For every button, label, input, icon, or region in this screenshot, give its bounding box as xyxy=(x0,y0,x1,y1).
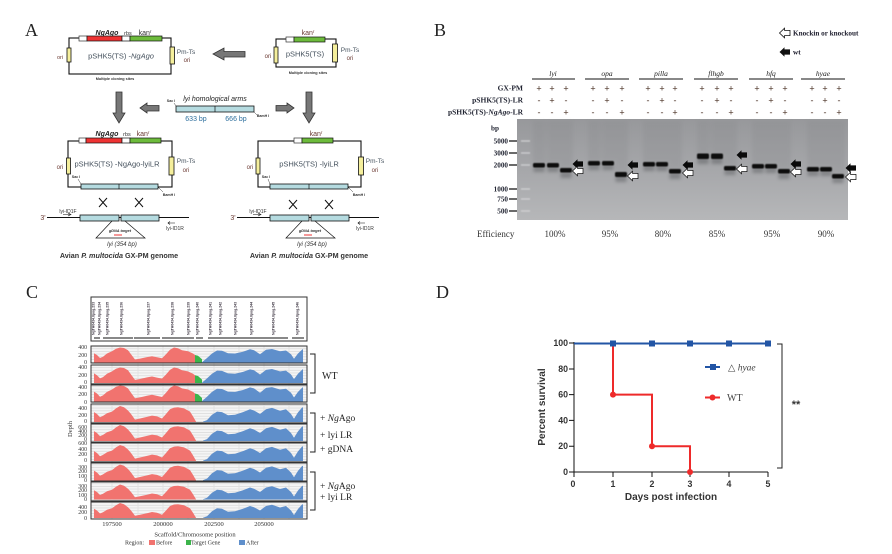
plus minus table: - xyxy=(756,108,758,118)
plus minus table: - xyxy=(784,96,786,106)
plasmid: pSHK5(TS) xyxy=(265,29,360,75)
lyi homological arms: lyi homological arms xyxy=(183,96,247,103)
panel C: depth coverage xyxy=(26,282,355,546)
legend: WT: WT xyxy=(727,393,743,404)
condition row labels xyxy=(448,84,524,116)
x axis labels xyxy=(102,521,274,538)
plus minus table: - xyxy=(606,108,608,118)
axes: 0 xyxy=(563,467,568,477)
plus minus table: - xyxy=(810,108,814,118)
lyi homological arms xyxy=(167,96,269,123)
gene headers: lyi xyxy=(549,69,557,78)
ladder labels: 3000 xyxy=(494,150,508,158)
plasmid: pSHK5(TS)-NgAgo: ori xyxy=(184,58,190,64)
plus minus table: - xyxy=(770,108,772,118)
plus minus table: + xyxy=(645,84,651,94)
plasmid: pSHK5(TS)-lyiLR: ori xyxy=(247,165,253,171)
panel letter A: A xyxy=(25,20,38,40)
annotation track: NgTH0434.lipog.243 xyxy=(234,302,238,335)
annotation track: NgTH0434.lipog.234 xyxy=(98,301,102,335)
efficiency row: 90% xyxy=(818,229,835,239)
plus minus table: + xyxy=(604,84,610,94)
efficiency row: 95% xyxy=(602,229,619,239)
depth axis labels: 400 xyxy=(78,385,87,391)
plus minus table xyxy=(536,84,842,118)
lyi homological arms: 633 bp xyxy=(185,116,207,123)
plus minus table: - xyxy=(538,108,540,118)
plus minus table: + xyxy=(728,108,734,118)
annotation track: NgTH0434.lipog.238 xyxy=(170,302,174,335)
efficiency row: 95% xyxy=(764,229,781,239)
plus minus table: + xyxy=(809,84,815,94)
genome recombination right: gDNA target xyxy=(298,229,322,233)
plus minus table: + xyxy=(619,84,625,94)
ladder labels: 750 xyxy=(497,196,508,204)
genome recombination right: 3' xyxy=(230,215,236,222)
plus minus table: - xyxy=(810,96,814,106)
gel image xyxy=(517,119,848,220)
plus minus table: - xyxy=(730,96,732,106)
depth area charts xyxy=(91,346,307,519)
annotation track: NgTH0434.lipog.244 xyxy=(250,301,254,335)
depth axis labels: 400 xyxy=(78,406,87,412)
panel letter D: D xyxy=(436,282,449,302)
plasmid: pSHK5(TS)-NgAgo-lyiLR: Pm-Ts xyxy=(177,158,196,165)
y axis title: Depth xyxy=(67,420,74,437)
ladder labels: 1000 xyxy=(494,186,508,194)
plasmid: pSHK5(TS)-NgAgo: Multiple cloning sites xyxy=(96,77,134,81)
depth axis labels: 0 xyxy=(84,360,87,366)
bracket: NgAgo lyi LR gDNA xyxy=(310,413,315,452)
plasmid: pSHK5(TS)-NgAgo-lyiLR: ori xyxy=(57,165,63,171)
lyi homological arms: Sac I xyxy=(167,99,175,103)
plus minus table: + xyxy=(782,84,788,94)
gene headers xyxy=(532,69,845,79)
plasmid: pSHK5(TS)-NgAgo: pSHK5(TS) -NgAgo xyxy=(88,52,154,60)
plus minus table: - xyxy=(564,96,568,106)
depth axis labels: 0 xyxy=(84,437,87,443)
panel letter C: C xyxy=(26,282,38,302)
depth axis labels: 100 xyxy=(78,493,87,499)
depth axis labels: 200 xyxy=(78,413,87,419)
plus minus table: - xyxy=(538,96,540,106)
efficiency row: 80% xyxy=(655,229,672,239)
efficiency row xyxy=(477,229,835,239)
ladder labels: 2000 xyxy=(494,162,508,170)
panel A: plasmid construction xyxy=(25,20,385,260)
label: NgAgo lyi LR gDNA: + gDNA xyxy=(320,445,353,455)
label: NgAgo lyi LR xyxy=(320,482,355,503)
plus minus table: + xyxy=(822,84,828,94)
plus minus table: + xyxy=(563,108,569,118)
hyae curve xyxy=(574,340,771,346)
gene headers: hfq xyxy=(766,69,776,78)
plus minus table: - xyxy=(646,108,650,118)
plasmid: pSHK5(TS)-NgAgo-lyiLR: BamH I xyxy=(163,193,175,197)
depth axis labels: 200 xyxy=(78,373,87,379)
region legend: Before xyxy=(156,540,173,546)
depth axis labels: 400 xyxy=(78,345,87,351)
arrow: pSHK5(TS) to pSHK5(TS)-NgAgo xyxy=(213,48,245,60)
depth axis labels: 300 xyxy=(78,465,87,471)
annotation track: NgTH0434.lipog.240 xyxy=(196,302,200,335)
label: NgAgo lyi LR gDNA: + lyi LR xyxy=(320,431,353,441)
band arrows: wild type xyxy=(572,150,856,173)
genome recombination right: lyi (354 bp) xyxy=(297,242,327,248)
plus minus table: + xyxy=(714,96,720,106)
axes: 100 xyxy=(553,338,568,348)
legend: arrows xyxy=(780,28,859,57)
axes: 5 xyxy=(766,479,771,489)
x axis labels: 202500 xyxy=(204,521,224,528)
depth axis labels: 200 xyxy=(78,469,87,475)
x axis title: Days post infection xyxy=(625,492,717,503)
annotation track: NgTH0434.lipog.241 xyxy=(208,302,212,335)
plus minus table: + xyxy=(768,84,774,94)
depth axis labels: 100 xyxy=(78,474,87,480)
genome recombination left: gDNA target xyxy=(108,229,132,233)
depth axis labels: 200 xyxy=(78,510,87,516)
gene headers: opa xyxy=(601,69,613,78)
plus minus table: + xyxy=(836,108,842,118)
plasmid: pSHK5(TS)-NgAgo-lyiLR: ori xyxy=(183,168,189,174)
plus minus table: - xyxy=(592,96,594,106)
plasmid: pSHK5(TS)-NgAgo: Pm-Ts xyxy=(177,49,196,56)
plus minus table: + xyxy=(672,108,678,118)
ladder labels xyxy=(491,124,517,216)
depth axis labels: 200 xyxy=(78,433,87,439)
depth axis labels: 0 xyxy=(84,458,87,464)
depth axis labels: 600 xyxy=(78,425,87,431)
plasmid: pSHK5(TS)-NgAgo-lyiLR: pSHK5(TS) -NgAgo-lyiLR xyxy=(74,160,160,168)
annotation track: NgTH0434.lipog.236 xyxy=(120,302,124,335)
genome label left: Avian P. multocida GX-PM genome xyxy=(60,251,178,260)
significance stars: ** xyxy=(792,399,801,411)
plasmid: pSHK5(TS): kan xyxy=(302,30,313,37)
plasmid: pSHK5(TS)-NgAgo xyxy=(57,29,196,81)
condition row labels: pSHK5(TS)-LR xyxy=(472,96,524,104)
annotation track: NgTH0434.lipog.239 xyxy=(186,302,190,335)
arrow: down left xyxy=(113,92,125,123)
plus minus table: + xyxy=(699,84,705,94)
gene headers: pilla xyxy=(653,69,668,78)
plasmid: pSHK5(TS): r xyxy=(313,29,315,34)
genome recombination right xyxy=(230,200,379,248)
plasmid: pSHK5(TS)-NgAgo-lyiLR xyxy=(57,130,196,197)
depth axis labels: 400 xyxy=(78,365,87,371)
depth axis labels: 0 xyxy=(84,419,87,425)
arrow: homology arms to left xyxy=(140,103,159,113)
plasmid: pSHK5(TS)-lyiLR: pSHK5(TS) -lyiLR xyxy=(279,160,339,168)
plus minus table: - xyxy=(716,108,718,118)
genome recombination right: lyi-ID1F xyxy=(249,209,267,215)
plus minus table: - xyxy=(660,108,664,118)
plasmid: pSHK5(TS): ori xyxy=(347,56,353,62)
plasmid: pSHK5(TS)-NgAgo: NgAgo xyxy=(96,30,119,37)
plasmid: pSHK5(TS)-NgAgo-lyiLR: Sac I xyxy=(72,175,80,179)
plasmid: pSHK5(TS)-NgAgo-lyiLR: r xyxy=(148,130,150,135)
plasmid: pSHK5(TS)-NgAgo: rbs xyxy=(124,31,132,37)
genome label right: Avian P. multocida GX-PM genome xyxy=(250,251,368,260)
x axis labels: 197500 xyxy=(102,521,122,528)
region legend: After xyxy=(246,540,259,546)
plasmid: pSHK5(TS)-NgAgo-lyiLR: rbs xyxy=(123,132,131,138)
ladder labels: 5000 xyxy=(494,138,508,146)
plasmid: pSHK5(TS)-lyiLR xyxy=(247,130,385,197)
label: NgAgo lyi LR: + lyi LR xyxy=(320,493,353,503)
significance bracket xyxy=(777,344,782,468)
gene headers: flhgb xyxy=(708,69,724,78)
plus minus table: + xyxy=(782,108,788,118)
axes: 20 xyxy=(558,441,568,451)
plus minus table: + xyxy=(728,84,734,94)
efficiency row: Efficiency xyxy=(477,229,515,239)
plus minus table: + xyxy=(836,84,842,94)
plasmid: pSHK5(TS)-lyiLR: Pm-Ts xyxy=(366,158,385,165)
plasmid: pSHK5(TS)-NgAgo: kan xyxy=(139,30,150,37)
ladder labels: bp xyxy=(491,124,499,132)
plus minus table: - xyxy=(646,96,650,106)
lyi homological arms: BamH I xyxy=(257,114,269,118)
band arrows: knockin or knockout xyxy=(572,164,856,182)
lyi homological arms: 666 bp xyxy=(225,116,247,123)
plus minus table: - xyxy=(550,108,554,118)
axes: 0 xyxy=(571,479,576,489)
panel B: gel electrophoresis xyxy=(434,20,859,239)
legend: arrows: Knockin or knockout xyxy=(793,30,859,38)
x axis labels: 200000 xyxy=(153,521,173,528)
y axis title: Percent survival xyxy=(537,368,548,446)
depth axis labels: 200 xyxy=(78,392,87,398)
annotation track: NgTH0434.lipog.235 xyxy=(106,302,110,335)
depth axis labels: 600 xyxy=(78,441,87,447)
annotation track xyxy=(91,297,307,341)
plasmid: pSHK5(TS): ori xyxy=(265,54,271,60)
panel D: survival curve xyxy=(436,282,801,503)
plus minus table: - xyxy=(838,96,840,106)
plus minus table: + xyxy=(754,84,760,94)
plus minus table: + xyxy=(563,84,569,94)
plus minus table: + xyxy=(714,84,720,94)
plasmid: pSHK5(TS)-lyiLR: ori xyxy=(372,168,378,174)
genome recombination left: lyi-ID1R xyxy=(166,226,184,232)
plus minus table: + xyxy=(619,108,625,118)
x axis labels: 205000 xyxy=(254,521,274,528)
depth axis labels: 400 xyxy=(78,429,87,435)
depth axis labels: 0 xyxy=(84,497,87,503)
efficiency row: 85% xyxy=(709,229,726,239)
label: WT: WT xyxy=(322,371,338,382)
depth axis labels: 400 xyxy=(78,447,87,453)
x axis labels: Scaffold/Chromosome position xyxy=(154,532,236,538)
depth axis labels: 0 xyxy=(84,400,87,406)
plus minus table: - xyxy=(592,108,594,118)
condition row labels: GX-PM xyxy=(498,84,523,92)
plasmid: pSHK5(TS): pSHK5(TS) xyxy=(286,50,325,58)
arrow: down right xyxy=(303,92,315,123)
axes: 40 xyxy=(558,416,568,426)
gene headers: hyae xyxy=(816,69,831,78)
plasmid: pSHK5(TS)-NgAgo: r xyxy=(150,29,152,34)
axes: 80 xyxy=(558,364,568,374)
axes: 60 xyxy=(558,390,568,400)
plus minus table: + xyxy=(659,96,665,106)
depth axis labels: 400 xyxy=(78,505,87,511)
legend: arrows: wt xyxy=(793,48,801,56)
depth axis labels: 200 xyxy=(78,488,87,494)
axes: 3 xyxy=(688,479,693,489)
legend: hyae xyxy=(705,364,756,374)
depth axis labels xyxy=(78,345,87,522)
plus minus table: - xyxy=(700,108,704,118)
depth axis labels: 0 xyxy=(84,380,87,386)
plasmid: pSHK5(TS)-NgAgo-lyiLR: kan xyxy=(137,131,148,138)
WT curve xyxy=(610,343,693,475)
plus minus table: + xyxy=(672,84,678,94)
plus minus table: - xyxy=(824,108,826,118)
genome recombination left: lyi-ID1F xyxy=(59,209,77,215)
plus minus table: + xyxy=(659,84,665,94)
plus minus table: + xyxy=(822,96,828,106)
plus minus table: + xyxy=(768,96,774,106)
ladder labels: 500 xyxy=(497,208,508,216)
bracket: WT xyxy=(310,354,315,393)
depth axis labels: 300 xyxy=(78,484,87,490)
efficiency row: 100% xyxy=(544,229,566,239)
panel letter B: B xyxy=(434,20,446,40)
plasmid: pSHK5(TS)-lyiLR: Sac I xyxy=(262,175,270,179)
plus minus table: + xyxy=(536,84,542,94)
plus minus table: - xyxy=(700,96,704,106)
annotation track: NgTH0434.lipog.246 xyxy=(296,302,300,335)
plasmid: pSHK5(TS)-NgAgo-lyiLR: NgAgo xyxy=(96,131,119,138)
genome recombination right: lyi-ID1R xyxy=(356,226,374,232)
plus minus table: + xyxy=(604,96,610,106)
plus minus table: - xyxy=(756,96,758,106)
legend: hyae: △ hyae xyxy=(728,364,756,374)
plasmid: pSHK5(TS)-lyiLR: kan xyxy=(310,131,321,138)
annotation track: NgTH0434.lipog.237 xyxy=(146,302,150,335)
region legend: Region: xyxy=(125,540,144,546)
annotation track: NgTH0434.lipog.245 xyxy=(272,302,276,335)
annotation track: NgTH0434.lipog.233 xyxy=(92,302,96,335)
plasmid: pSHK5(TS)-lyiLR: BamH I xyxy=(353,193,365,197)
label: NgAgo lyi LR: + NgAgo xyxy=(320,482,355,492)
plasmid: pSHK5(TS)-lyiLR: r xyxy=(321,130,323,135)
depth axis labels: 0 xyxy=(84,516,87,522)
plasmid: pSHK5(TS): Pm-Ts xyxy=(341,47,360,54)
axes: 1 xyxy=(611,479,616,489)
label: NgAgo lyi LR gDNA xyxy=(320,414,355,455)
depth axis labels: 200 xyxy=(78,353,87,359)
plus minus table: + xyxy=(549,96,555,106)
genome recombination left xyxy=(40,198,189,248)
annotation track: NgTH0434.lipog.242 xyxy=(218,302,222,335)
plus minus table: - xyxy=(620,96,624,106)
genome recombination left: lyi (354 bp) xyxy=(107,242,137,248)
plus minus table: + xyxy=(590,84,596,94)
plus minus table: - xyxy=(674,96,676,106)
label: NgAgo lyi LR gDNA: + NgAgo xyxy=(320,414,355,424)
axes xyxy=(553,338,771,489)
bracket: NgAgo lyi LR xyxy=(310,472,315,510)
legend: WT xyxy=(705,393,743,404)
region legend xyxy=(125,540,259,546)
plasmid: pSHK5(TS)-NgAgo: ori xyxy=(57,55,63,61)
condition row labels: pSHK5(TS)-NgAgo-LR xyxy=(448,108,524,116)
region legend: Target Gene xyxy=(191,540,221,546)
depth axis labels: 200 xyxy=(78,452,87,458)
depth axis labels: 0 xyxy=(84,478,87,484)
plus minus table: + xyxy=(549,84,555,94)
plasmid: pSHK5(TS): Multiple cloning sites xyxy=(289,71,327,75)
axes: 4 xyxy=(727,479,732,489)
genome recombination left: 3' xyxy=(40,215,46,222)
axes: 2 xyxy=(650,479,655,489)
arrow: homology arms to right xyxy=(276,103,294,113)
